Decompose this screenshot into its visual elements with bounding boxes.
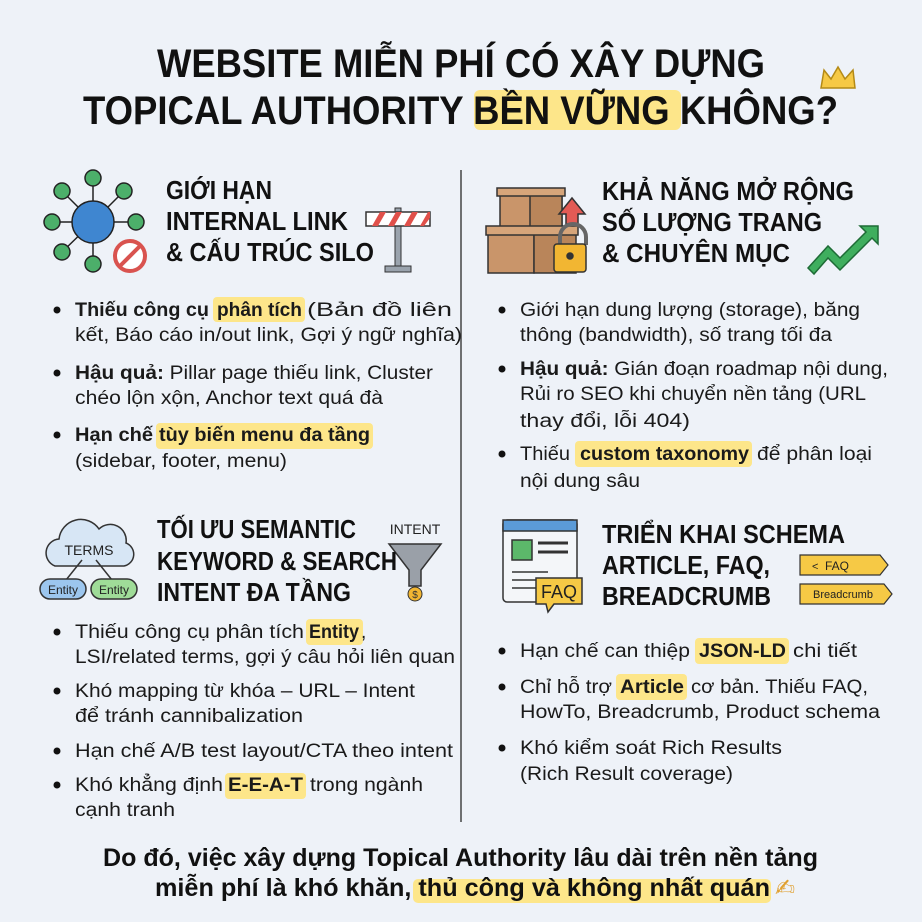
bullets: JSON-LD — [699, 641, 786, 662]
bullets: (Rich Result coverage) — [520, 764, 733, 785]
panel: scalability — [486, 175, 888, 492]
heading: INTENT ĐA TẦNG — [157, 577, 351, 607]
conclusion: miễn phí là khó khăn, thủ công và không nhất quán — [155, 872, 770, 902]
bullets: Article — [620, 677, 684, 698]
icon: browser with FAQ — [503, 520, 582, 612]
heading: TỐI ƯU SEMANTIC — [157, 514, 356, 544]
icon: link network — [44, 170, 145, 272]
bullets: Thiếu công cụ phân tích — [75, 622, 304, 643]
icon: intent funnel: INTENT — [390, 521, 441, 537]
bullets: tùy biến menu đa tầng — [159, 425, 370, 446]
heading: SỐ LƯỢNG TRANG — [602, 207, 822, 237]
icon: crown — [821, 67, 855, 88]
bullets: thông (bandwidth), số trang tối đa — [520, 325, 832, 346]
title: TOPICAL AUTHORITY BỀN VỮNG KHÔNG? — [83, 87, 838, 133]
title — [83, 40, 838, 133]
panel: schema — [498, 519, 892, 785]
bullets: Hậu quả: Gián đoạn roadmap nội dung, — [520, 359, 888, 380]
bullets: Hạn chế A/B test layout/CTA theo intent — [75, 741, 454, 762]
bullets: Khó khẳng định — [75, 774, 223, 796]
bullets: Khó kiểm soát Rich Results — [520, 738, 782, 759]
icon: terms cloud: Entity — [48, 583, 78, 597]
panel: semantic — [40, 514, 455, 821]
icon: terms cloud: Entity — [99, 583, 129, 597]
bullets — [54, 619, 455, 821]
icon: terms cloud: TERMS — [64, 542, 114, 558]
heading — [166, 175, 374, 267]
icon: boxes with lock — [486, 188, 586, 273]
bullets: kết, Báo cáo in/out link, Gợi ý ngữ nghĩa) — [75, 325, 462, 346]
conclusion: ✍ — [775, 875, 795, 902]
bullets: LSI/related terms, gợi ý câu hỏi liên quan — [75, 647, 455, 668]
bullets: Hạn chế — [75, 425, 153, 446]
bullets: (sidebar, footer, menu) — [75, 451, 287, 472]
icon: intent funnel: $ — [412, 590, 418, 601]
bullets: chi tiết — [793, 641, 858, 662]
bullets: Khó mapping từ khóa – URL – Intent — [75, 681, 416, 702]
icon: breadcrumb tags: Breadcrumb — [813, 589, 873, 601]
bullets: Entity — [309, 622, 359, 643]
bullets: E-E-A-T — [228, 775, 303, 796]
bullets: Thiếu công cụ — [75, 300, 209, 321]
bullets — [498, 300, 888, 492]
bullets: chéo lộn xộn, Anchor text quá đà — [75, 388, 383, 409]
heading — [157, 514, 397, 607]
bullets — [498, 638, 880, 785]
bullets: trong ngành — [310, 775, 423, 796]
bullets: để phân loại — [757, 444, 872, 465]
bullets: HowTo, Breadcrumb, Product schema — [520, 702, 880, 723]
heading: & CẤU TRÚC SILO — [166, 237, 374, 267]
heading: ARTICLE, FAQ, — [602, 550, 770, 580]
heading: TRIỂN KHAI SCHEMA — [602, 519, 845, 549]
bullets: để tránh cannibalization — [75, 706, 303, 727]
bullets: Chỉ hỗ trợ — [520, 676, 612, 698]
bullets: phân tích — [217, 300, 302, 321]
bullets: Hạn chế can thiệp — [520, 641, 690, 662]
panel: internal link — [44, 170, 462, 472]
heading: & CHUYÊN MỤC — [602, 238, 790, 268]
bullets: Thiếu — [520, 444, 570, 465]
icon: breadcrumb tags: < — [812, 561, 818, 573]
bullets: Giới hạn dung lượng (storage), băng — [520, 300, 860, 321]
bullets: Rủi ro SEO khi chuyển nền tảng (URL — [520, 384, 866, 405]
heading — [602, 175, 854, 268]
bullets: cạnh tranh — [75, 800, 175, 821]
heading: GIỚI HẠN — [166, 175, 272, 205]
bullets: nội dung sâu — [520, 471, 640, 492]
icon: breadcrumb tags — [800, 555, 892, 604]
heading — [602, 519, 845, 611]
bullets: , — [361, 622, 366, 643]
heading: BREADCRUMB — [602, 581, 771, 611]
bullets: Hậu quả: Pillar page thiếu link, Cluster — [75, 363, 434, 384]
icon: terms cloud — [40, 519, 137, 599]
heading: KHẢ NĂNG MỞ RỘNG — [602, 175, 854, 206]
title: WEBSITE MIỄN PHÍ CÓ XÂY DỰNG — [157, 40, 765, 86]
icon: browser with FAQ: FAQ — [541, 582, 577, 602]
conclusion: Do đó, việc xây dựng Topical Authority lâu dài trên nền tảng — [103, 844, 818, 872]
bullets: thay đổi, lỗi 404) — [520, 410, 690, 432]
bullets — [54, 297, 462, 472]
bullets: (Bản đồ liên — [307, 300, 452, 321]
heading: INTERNAL LINK — [166, 206, 348, 236]
bullets: custom taxonomy — [580, 444, 749, 465]
icon: breadcrumb tags: FAQ — [825, 559, 849, 573]
conclusion — [103, 844, 818, 903]
bullets: cơ bản. Thiếu FAQ, — [691, 677, 868, 698]
icon: green trend arrow — [808, 226, 878, 274]
heading: KEYWORD & SEARCH — [157, 546, 397, 576]
icon: barrier — [366, 208, 430, 272]
icon: intent funnel — [389, 521, 441, 601]
